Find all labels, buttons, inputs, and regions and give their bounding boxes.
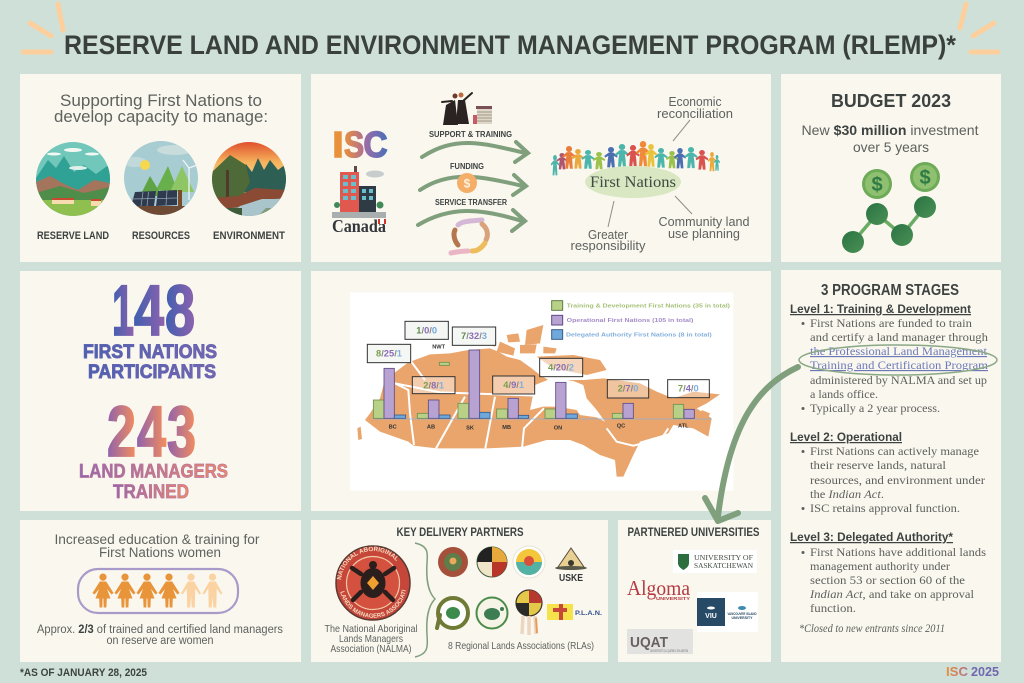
stat: 148: 1 bbox=[112, 272, 134, 351]
callout: ATL counts bbox=[668, 380, 709, 398]
callout: AB counts: 2/8/1 bbox=[423, 380, 444, 390]
NALMA caption bbox=[324, 623, 418, 655]
logo: regional association 2 bbox=[477, 547, 507, 577]
logo: regional association 7 bbox=[516, 590, 542, 635]
map of Canada with bars bbox=[350, 292, 733, 491]
province labels: AB bbox=[427, 424, 435, 430]
stat: 243: 2 bbox=[107, 393, 136, 472]
level 2: Level 2: Operational bbox=[790, 430, 902, 444]
level 2: the Indian Act . bbox=[810, 488, 884, 501]
province labels: BC bbox=[389, 424, 397, 430]
panel heading: Increased education & training for bbox=[54, 532, 260, 547]
outcome: greater responsibility: Greater bbox=[588, 227, 629, 242]
logo: Algoma University: UNIVERSITY bbox=[656, 596, 690, 601]
highlight oval around link bbox=[799, 345, 997, 375]
arrow: support and training bbox=[422, 130, 528, 162]
stat: 243: 3 bbox=[167, 393, 196, 472]
stat label: land managers trained: TRAINED bbox=[113, 481, 189, 503]
caption: Approx. 2/3 of trained and certified land managers bbox=[37, 624, 283, 636]
logo: regional association 6 bbox=[476, 598, 508, 628]
logo: NALMA seal bbox=[335, 545, 411, 621]
province labels: QC bbox=[617, 424, 625, 430]
logo: VIU: VANCOUVER ISLAND bbox=[728, 612, 757, 616]
ISC logo bbox=[332, 124, 388, 165]
outcome: greater responsibility: responsibility bbox=[570, 238, 646, 253]
panel: capacity to manage bbox=[20, 74, 301, 262]
level 1: Training and Certification Program bbox=[810, 359, 988, 372]
logo: VIU: VIU bbox=[705, 613, 717, 620]
logo: P.L.A.N. bbox=[547, 604, 602, 620]
outcome: economic reconciliation: reconciliation bbox=[657, 106, 733, 121]
callout: ON counts: 4/20/2 bbox=[548, 362, 574, 372]
callout: ON counts bbox=[540, 358, 583, 377]
bars: AB bbox=[417, 400, 450, 418]
logo: USKE: USKE bbox=[559, 573, 583, 584]
budget text: New $30 million investment bbox=[802, 122, 979, 138]
province labels: NWT bbox=[432, 344, 446, 350]
legend: Delegated Authority First Nations (8 in total) bbox=[566, 332, 712, 338]
callout: NWT counts: 1/0/0 bbox=[416, 325, 437, 335]
panel heading: develop capacity to manage: bbox=[54, 108, 268, 126]
level 1: Typically a 2 year process. bbox=[810, 402, 940, 415]
icon: investment growth chart bbox=[842, 162, 940, 253]
footer ISC 2025 logo: 2025 bbox=[971, 664, 999, 679]
outcome: economic reconciliation: Economic bbox=[668, 94, 722, 109]
ISC logo: I bbox=[332, 124, 344, 165]
panel: program flow bbox=[311, 74, 771, 262]
icon: right sun rays bbox=[960, 4, 998, 52]
level 2: their reserve lands, natural bbox=[810, 459, 946, 472]
stat: 148: 8 bbox=[165, 272, 195, 351]
panel heading: PARTNERED UNIVERSITIES bbox=[628, 527, 760, 539]
level 1: Level 1: Training & Development bbox=[790, 302, 971, 316]
logo: University of Saskatchewan bbox=[673, 550, 757, 573]
callout: SK counts bbox=[452, 327, 496, 345]
logo: UQAT bbox=[627, 629, 693, 654]
stat: 243 bbox=[107, 393, 196, 472]
label: environment: ENVIRONMENT bbox=[213, 230, 285, 242]
logo: VIU bbox=[697, 592, 758, 632]
callout: MB counts bbox=[493, 376, 535, 394]
first nations oval bbox=[585, 166, 681, 198]
callout: BC counts bbox=[367, 344, 411, 363]
level 3: Level 3: Delegated Authority* bbox=[790, 530, 953, 544]
level 2: First Nations can actively manage bbox=[810, 445, 979, 458]
bars: ATL bbox=[673, 404, 694, 418]
province labels bbox=[389, 344, 689, 431]
budget text bbox=[802, 122, 979, 155]
label: resources: RESOURCES bbox=[132, 230, 190, 242]
ISC logo: S bbox=[344, 124, 364, 165]
arrow: link to universities bbox=[705, 367, 798, 521]
panel heading bbox=[54, 92, 268, 126]
callout: MB counts: 4/9/1 bbox=[503, 380, 524, 390]
legend: Operational First Nations (105 in total) bbox=[567, 318, 693, 324]
level 1: and certify a land manager through bbox=[810, 331, 988, 344]
arrow: funding bbox=[420, 162, 526, 195]
callout: BC counts: 8/25/1 bbox=[376, 348, 402, 358]
Canada wordmark: Canada bbox=[332, 216, 386, 236]
arrow: funding: FUNDING bbox=[450, 162, 484, 171]
legend: Training & Development First Nations (35 in total) bbox=[567, 303, 730, 309]
closed note: *Closed to new entrants since 2011 bbox=[799, 622, 945, 635]
budget heading: BUDGET 2023 bbox=[831, 91, 951, 111]
icon: people celebrating with books bbox=[442, 92, 492, 125]
logo: NALMA seal: NATIONAL ABORIGINAL bbox=[336, 546, 398, 580]
logo: P.L.A.N.: P.L.A.N. bbox=[575, 610, 602, 617]
icon: circle of hands bbox=[451, 220, 487, 253]
arrow: funding: $ bbox=[464, 176, 471, 190]
logo: University of Saskatchewan: SASKATCHEWAN bbox=[694, 561, 754, 570]
logo: NALMA seal: LANDS MANAGERS ASSOCIATION bbox=[340, 590, 406, 618]
stat label: land managers trained bbox=[79, 460, 228, 503]
icon: investment growth chart: $ bbox=[919, 167, 931, 189]
panel heading: KEY DELIVERY PARTNERS bbox=[396, 527, 524, 539]
bar: NWT bbox=[439, 362, 449, 365]
logo: regional association 3 bbox=[513, 546, 545, 578]
level 1 bbox=[790, 302, 988, 415]
icon: government building bbox=[332, 166, 386, 218]
level 3 bbox=[790, 530, 987, 615]
logo: UQAT: UQAT bbox=[630, 634, 668, 651]
outcome: community land use planning bbox=[658, 196, 750, 241]
footer ISC 2025 logo bbox=[946, 664, 999, 679]
level 3: section 53 or section 60 of the bbox=[810, 574, 965, 587]
label: reserve land: RESERVE LAND bbox=[37, 230, 109, 242]
logo: USKE bbox=[555, 548, 587, 584]
arrow: service transfer: SERVICE TRANSFER bbox=[435, 198, 507, 207]
level 3: function. bbox=[810, 602, 856, 615]
stat: 148: 4 bbox=[134, 272, 164, 351]
logo: regional association 5 bbox=[437, 598, 468, 628]
bars: BC bbox=[373, 368, 406, 418]
ISC logo: C bbox=[364, 124, 388, 165]
icon: investment growth chart: $ bbox=[871, 174, 883, 196]
province labels: SK bbox=[466, 425, 475, 431]
logo: Algoma University: Algoma bbox=[627, 576, 691, 600]
caption bbox=[37, 624, 283, 647]
bars: MB bbox=[497, 398, 529, 418]
panel heading: 3 PROGRAM STAGES bbox=[821, 282, 959, 299]
bars: SK bbox=[458, 350, 490, 418]
callout: SK counts: 7/32/3 bbox=[461, 331, 487, 341]
bars: QC bbox=[612, 403, 633, 418]
icon: environment scene bbox=[212, 142, 286, 216]
bars: ON bbox=[545, 382, 577, 418]
callout: QC counts: 2/7/0 bbox=[618, 384, 638, 394]
caption: on reserve are women bbox=[106, 635, 214, 647]
level 1: First Nations are funded to train bbox=[810, 317, 972, 330]
icon: resources scene bbox=[123, 141, 198, 215]
panel: map of participation bbox=[311, 271, 771, 511]
arrow: service transfer bbox=[418, 198, 525, 231]
brace bbox=[415, 543, 435, 657]
outcome: community land use planning: use planning bbox=[668, 226, 740, 241]
icon: left sun rays bbox=[23, 4, 63, 52]
panel: women training bbox=[20, 520, 301, 662]
first nations people row bbox=[551, 141, 720, 175]
logo: University of Saskatchewan: UNIVERSITY OF bbox=[694, 553, 753, 562]
first nations oval: First Nations bbox=[590, 174, 676, 191]
outcome: community land use planning: Community land bbox=[658, 214, 750, 229]
stat label: first nations participants: FIRST NATIONS bbox=[83, 341, 217, 363]
NALMA caption: Lands Managers bbox=[339, 633, 403, 645]
panel heading: Supporting First Nations to bbox=[60, 92, 262, 110]
stat label: first nations participants bbox=[83, 341, 217, 383]
budget text: over 5 years bbox=[853, 139, 929, 155]
panel: key delivery partners bbox=[311, 520, 608, 662]
callout: QC counts bbox=[607, 380, 649, 398]
icon: six people pictogram bbox=[78, 569, 238, 613]
icon: reserve land scene bbox=[36, 142, 110, 218]
province labels: ATL bbox=[678, 424, 689, 430]
arrow: support and training: SUPPORT & TRAINING bbox=[429, 130, 512, 139]
level 1: a lands office. bbox=[810, 388, 878, 401]
NALMA caption: The National Aboriginal bbox=[324, 623, 418, 635]
panel: 3 program stages bbox=[781, 270, 1001, 662]
stat label: land managers trained: LAND MANAGERS bbox=[79, 460, 228, 482]
level 3: First Nations have additional lands bbox=[810, 546, 987, 559]
callout: NWT counts bbox=[405, 321, 448, 339]
level 3: management authority under bbox=[810, 560, 950, 573]
outcome: economic reconciliation bbox=[657, 94, 733, 141]
logo: regional association 1 bbox=[438, 547, 468, 577]
NALMA caption: Association (NALMA) bbox=[330, 643, 412, 655]
callout: AB counts bbox=[412, 377, 455, 394]
stat: 148 bbox=[112, 272, 195, 351]
panel: budget 2023 bbox=[781, 74, 1001, 262]
province labels: ON bbox=[554, 425, 562, 431]
callout: ATL counts: 7/4/0 bbox=[678, 384, 699, 394]
panel: partnered universities bbox=[618, 520, 771, 662]
logo: UQAT: UNIVERSITÉ DU QUÉBEC EN ABITIBI bbox=[650, 648, 688, 653]
level 2: resources, and environment under bbox=[810, 474, 985, 487]
panel heading: First Nations women bbox=[99, 545, 221, 560]
level 2: ISC retains approval function. bbox=[810, 502, 960, 515]
logo: VIU: UNIVERSITY bbox=[731, 616, 753, 620]
outcome: greater responsibility bbox=[570, 201, 646, 253]
stat: 243: 4 bbox=[137, 393, 166, 472]
footnote: *AS OF JANUARY 28, 2025 bbox=[20, 667, 147, 679]
level 1: administered by NALMA and set up bbox=[810, 374, 987, 387]
level 3: Indian Act , and take on approval bbox=[809, 588, 974, 601]
RLA caption: 8 Regional Lands Associations (RLAs) bbox=[448, 640, 594, 652]
level 2 bbox=[790, 430, 985, 515]
stat label: first nations participants: PARTICIPANTS bbox=[88, 361, 216, 383]
title: RESERVE LAND AND ENVIRONMENT MANAGEMENT PROGRAM (RLEMP)* bbox=[64, 30, 957, 60]
footer ISC 2025 logo: ISC bbox=[946, 664, 969, 679]
panel heading bbox=[54, 532, 260, 560]
legend bbox=[552, 301, 730, 339]
province labels: MB bbox=[502, 425, 511, 431]
panel: participant numbers bbox=[20, 271, 301, 511]
level 1: the Professional Land Management bbox=[810, 345, 988, 358]
map shape bbox=[357, 325, 720, 477]
